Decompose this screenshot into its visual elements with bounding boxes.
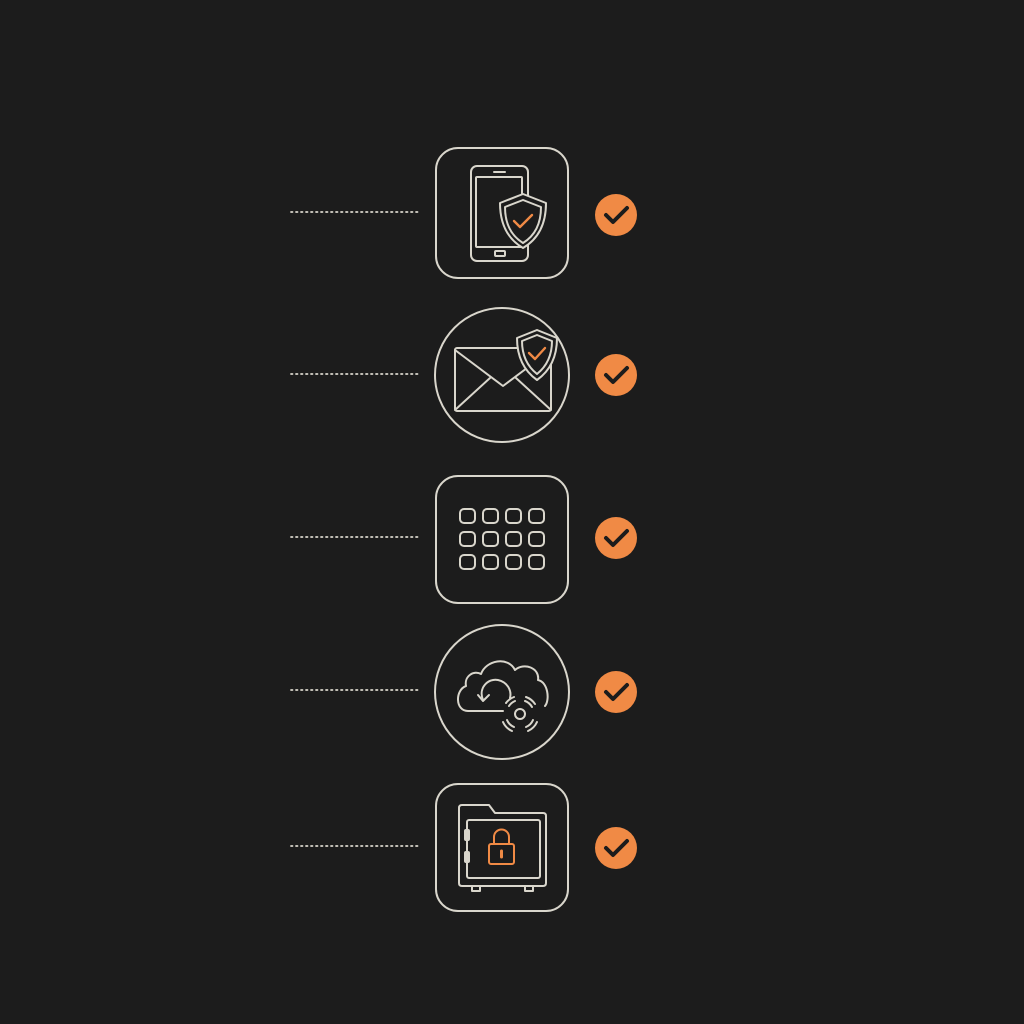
dotted connector 2	[291, 373, 420, 375]
dotted connector 5	[291, 845, 420, 847]
icon frame: rounded square	[436, 784, 568, 911]
row 1: phone security	[291, 148, 637, 278]
icon frame: circle	[435, 625, 569, 759]
icon: envelope with shield	[455, 330, 557, 411]
check badge 4	[595, 671, 637, 713]
icon frame: rounded square	[436, 148, 568, 278]
check badge 2	[595, 354, 637, 396]
dotted connector 4	[291, 689, 420, 691]
icon: keypad grid	[460, 509, 544, 569]
icon: folder safe with lock	[459, 805, 546, 891]
row 2: email security	[291, 308, 637, 442]
check badge 5	[595, 827, 637, 869]
dotted connector 3	[291, 536, 420, 538]
check badge 3	[595, 517, 637, 559]
icon: cloud with sync target	[458, 661, 548, 731]
dotted connector 1	[291, 211, 420, 213]
check badge 1	[595, 194, 637, 236]
icon frame: rounded square	[436, 476, 568, 603]
icon: phone with shield	[471, 166, 546, 261]
row 3: keypad	[291, 476, 637, 603]
row 4: cloud backup	[291, 625, 637, 759]
icon frame: circle	[435, 308, 569, 442]
row 5: secure folder vault	[291, 784, 637, 911]
